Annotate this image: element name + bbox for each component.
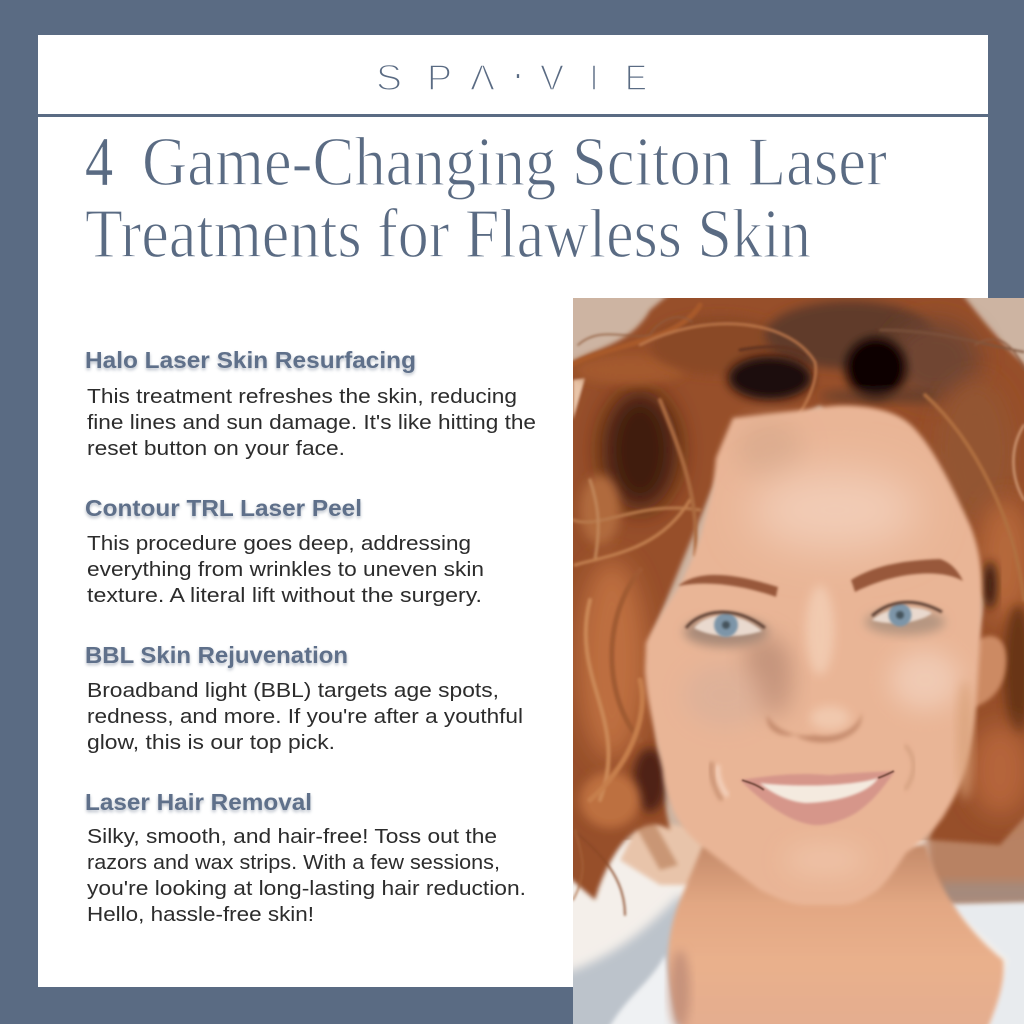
treatment: Halo Laser Skin Resurfacing: This treatment refreshes the skin, reducing bbox=[87, 385, 517, 408]
logo: SPA·VIE: P bbox=[427, 57, 452, 98]
treatment: Laser Hair Removal: razors and wax strips. With a few sessions, bbox=[87, 851, 500, 874]
header divider line bbox=[38, 114, 988, 117]
title: Treatments for Flawless Skin bbox=[85, 196, 811, 273]
face bbox=[645, 406, 982, 905]
hair strands bbox=[573, 305, 1024, 915]
title bbox=[85, 124, 887, 273]
treatment: BBL Skin Rejuvenation bbox=[85, 642, 523, 754]
neck bbox=[668, 845, 1003, 1024]
treatment: Laser Hair Removal: Hello, hassle-free skin! bbox=[87, 903, 314, 926]
logo: SPA·VIE: · bbox=[514, 53, 522, 94]
treatment: BBL Skin Rejuvenation: redness, and more. If you're after a youthful bbox=[87, 705, 523, 728]
title: Game-Changing Sciton Laser bbox=[142, 124, 887, 201]
logo: SPA·VIE: V bbox=[540, 57, 564, 98]
mouth bbox=[711, 745, 914, 825]
treatment: Halo Laser Skin Resurfacing bbox=[85, 347, 536, 460]
treatment: Laser Hair Removal bbox=[85, 789, 526, 926]
logo: SPA·VIE: E bbox=[625, 57, 647, 98]
treatment: BBL Skin Rejuvenation: BBL Skin Rejuvenation bbox=[85, 642, 348, 668]
eyes bbox=[684, 602, 945, 647]
treatment: Contour TRL Laser Peel: everything from wrinkles to uneven skin bbox=[87, 558, 484, 581]
treatment: Contour TRL Laser Peel: This procedure goes deep, addressing bbox=[87, 532, 471, 555]
treatment: Halo Laser Skin Resurfacing: reset button on your face. bbox=[87, 437, 345, 460]
treatment: BBL Skin Rejuvenation: Broadband light (BBL) targets age spots, bbox=[87, 679, 499, 702]
title: 4 bbox=[85, 124, 113, 201]
logo: SPA·VIE: S bbox=[376, 57, 402, 98]
logo: SPA·VIE: Λ bbox=[470, 57, 495, 98]
hair mass bbox=[560, 285, 1024, 900]
portrait photo illustration bbox=[560, 285, 1024, 1024]
treatment: Contour TRL Laser Peel: texture. A literal lift without the surgery. bbox=[87, 584, 482, 607]
treatment: BBL Skin Rejuvenation: glow, this is our top pick. bbox=[87, 731, 335, 754]
ear bbox=[972, 636, 1006, 708]
treatment: Laser Hair Removal: Silky, smooth, and hair-free! Toss out the bbox=[87, 825, 497, 848]
treatment: Laser Hair Removal: Laser Hair Removal bbox=[85, 789, 312, 815]
lower background and shirt bbox=[560, 800, 1024, 1024]
treatment: Halo Laser Skin Resurfacing: Halo Laser Skin Resurfacing bbox=[85, 347, 416, 373]
treatment: Laser Hair Removal: you're looking at long-lasting hair reduction. bbox=[87, 877, 526, 900]
logo: SPA·VIE: I bbox=[590, 57, 598, 98]
logo: SPA·VIE bbox=[376, 53, 647, 98]
nose bbox=[767, 585, 862, 742]
treatment: Contour TRL Laser Peel: Contour TRL Laser Peel bbox=[85, 495, 362, 521]
eyebrows bbox=[678, 559, 963, 597]
treatment: Contour TRL Laser Peel bbox=[85, 495, 484, 607]
treatment: Halo Laser Skin Resurfacing: fine lines and sun damage. It's like hitting the bbox=[87, 411, 536, 434]
